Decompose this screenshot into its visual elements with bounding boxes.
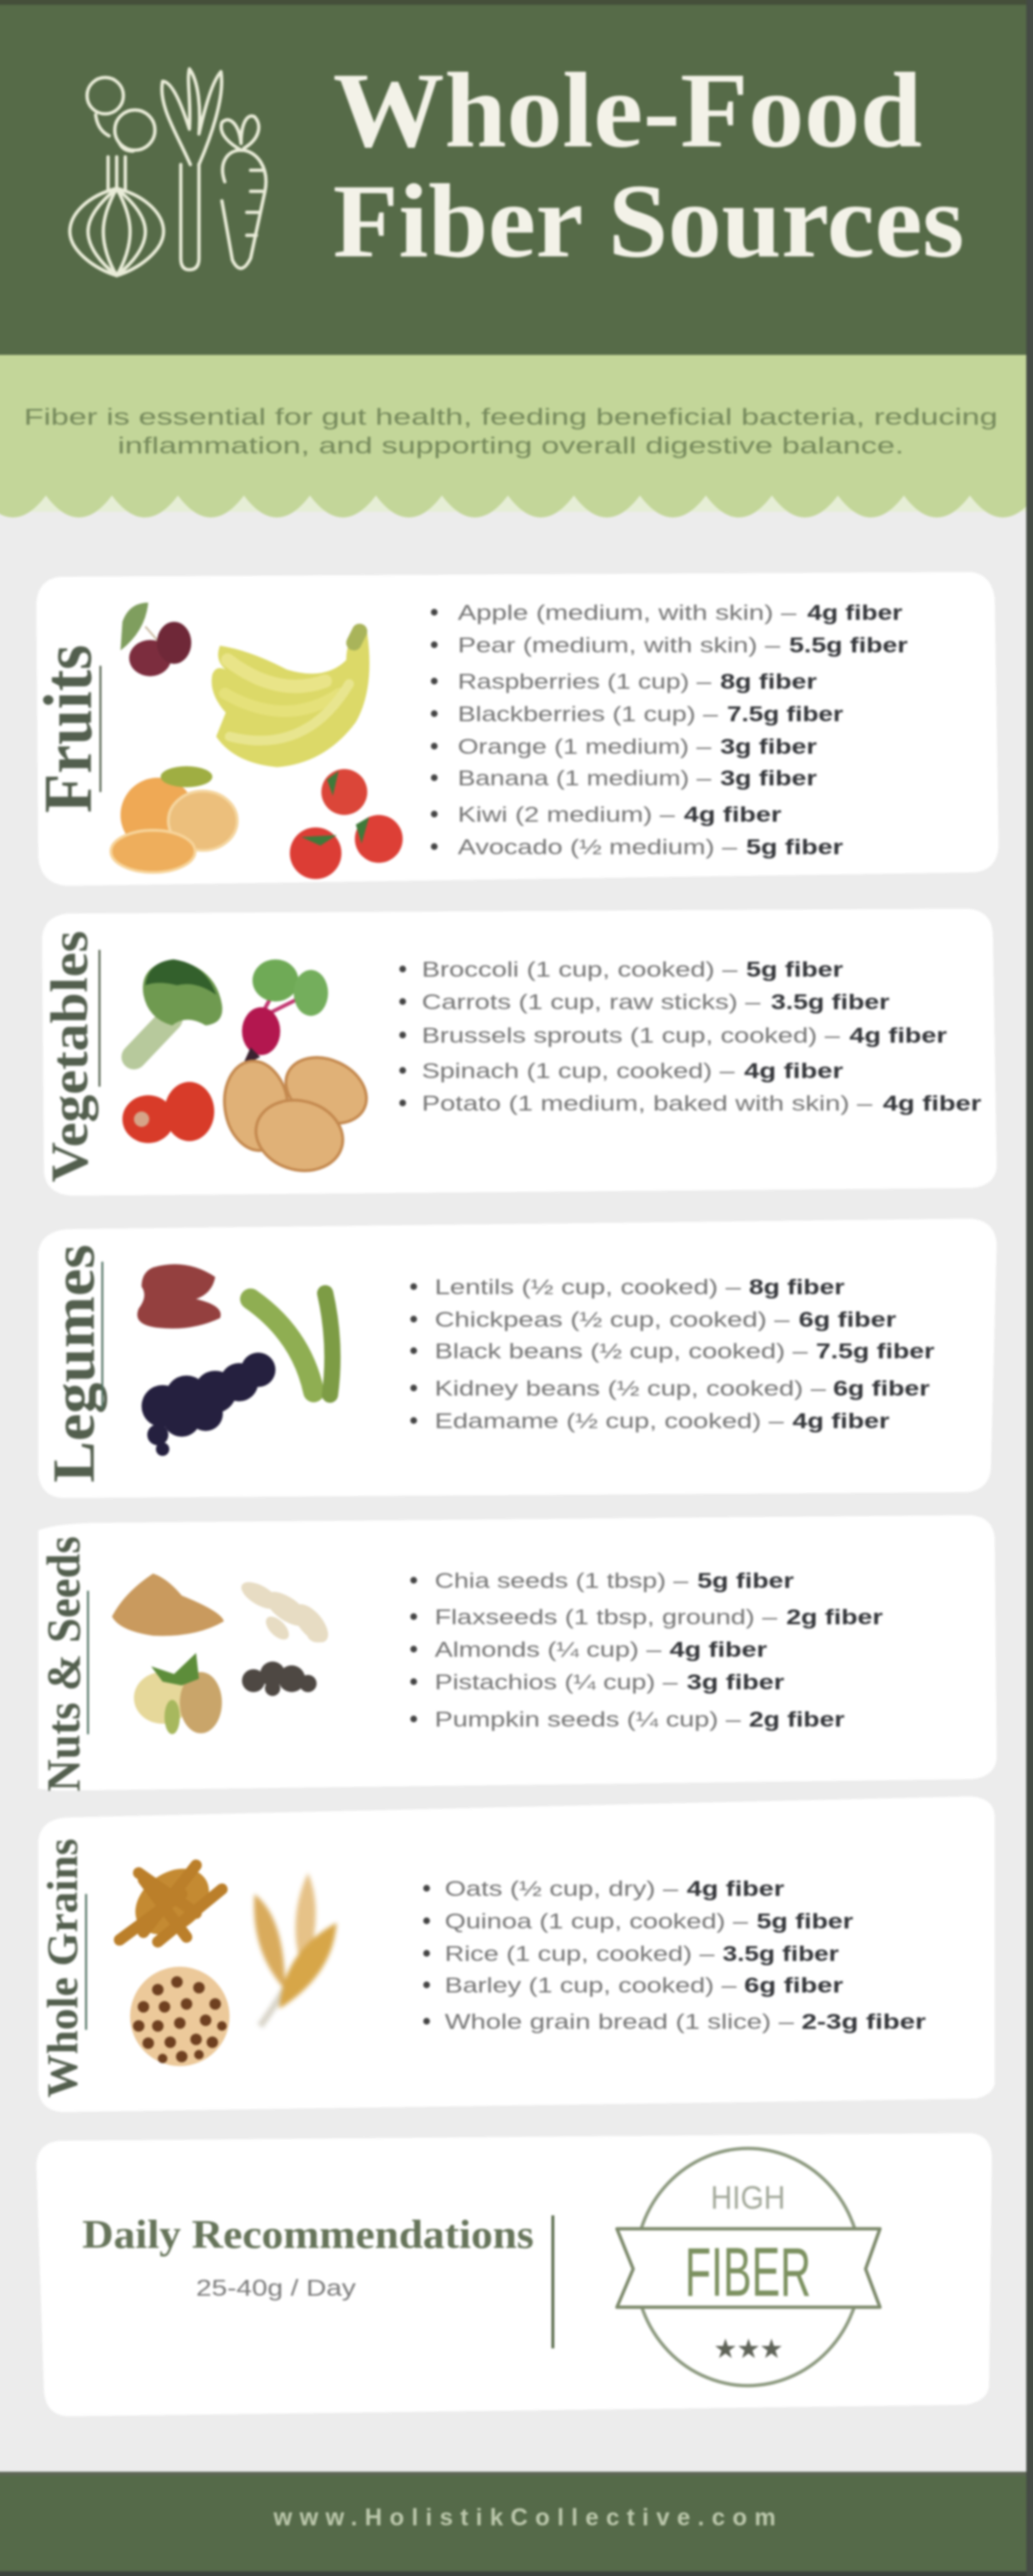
icon: strawberries	[290, 769, 403, 879]
list: whole grains: Rice (1 cup, cooked) –	[445, 1942, 715, 1966]
list: fruits: 4g fiber	[807, 601, 903, 625]
list: fruits: 8g fiber	[720, 670, 817, 694]
heading: vegetables: Vegetables	[40, 931, 99, 1182]
icon: bananas	[211, 631, 369, 767]
list: fruits: 5g fiber	[746, 835, 844, 859]
icon: cherries	[121, 603, 191, 676]
list: nuts and seeds: 5g fiber	[697, 1569, 794, 1593]
list: vegetables: 4g fiber	[849, 1024, 947, 1047]
list: fruits: Avocado (½ medium) –	[458, 835, 737, 859]
intro text	[24, 405, 998, 459]
list: legumes: 4g fiber	[792, 1409, 890, 1433]
list: whole grains: 6g fiber	[744, 1973, 844, 1997]
list: nuts and seeds: Chia seeds (1 tbsp) –	[434, 1569, 689, 1593]
list: fruits: Apple (medium, with skin) –	[458, 601, 797, 625]
icon: kidney beans	[138, 1265, 221, 1329]
list: nuts and seeds: 3g fiber	[687, 1670, 784, 1694]
list: legumes: Black beans (½ cup, cooked) –	[434, 1339, 808, 1363]
intro band with scalloped edge	[0, 355, 1033, 517]
list: legumes: Kidney beans (½ cup, cooked) –	[434, 1376, 826, 1400]
list: fruits: Blackberries (1 cup) –	[458, 702, 718, 726]
list: fruits: Kiwi (2 medium) –	[458, 803, 675, 826]
list: whole grains: 3.5g fiber	[723, 1942, 839, 1966]
heading: legumes: Legumes	[42, 1244, 107, 1483]
heading: nuts and seeds: Nuts & Seeds	[36, 1536, 90, 1792]
intro text: inflammation, and supporting overall digestive balance.	[118, 433, 904, 459]
icon: oats seeds	[237, 1576, 335, 1648]
icon: vegetables line art	[70, 69, 266, 275]
list: vegetables: 4g fiber	[883, 1091, 981, 1115]
list: vegetables: Carrots (1 cup, raw sticks) –	[422, 990, 761, 1014]
title: Fiber Sources	[333, 163, 964, 279]
list: fruits: Pear (medium, with skin) –	[458, 633, 780, 657]
header band	[0, 0, 1033, 355]
list: whole grains: Whole grain bread (1 slice) –	[445, 2010, 795, 2034]
icon: almonds	[112, 1574, 224, 1636]
icon: peppers	[122, 1082, 214, 1143]
list: legumes: 6g fiber	[799, 1308, 896, 1332]
icon: potatoes	[219, 1045, 377, 1180]
title	[333, 52, 964, 279]
list: fruits: 3g fiber	[720, 766, 817, 790]
panel: fruits	[30, 572, 999, 886]
list: legumes: 6g fiber	[833, 1376, 930, 1400]
icon: quinoa disk	[130, 1967, 230, 2066]
icon: oats	[120, 1855, 222, 1949]
icon: high fiber badge: ★★★	[714, 2333, 782, 2365]
panel: whole grains	[38, 1796, 995, 2112]
panel: vegetables	[40, 909, 997, 1196]
icon: beet	[242, 959, 328, 1067]
list: whole grains: 4g fiber	[687, 1877, 784, 1901]
icon: high fiber badge: FIBER	[685, 2235, 811, 2311]
list: vegetables: Broccoli (1 cup, cooked) –	[422, 958, 738, 981]
panel: nuts and seeds	[36, 1515, 997, 1792]
icon: broccoli	[134, 959, 222, 1057]
list: fruits: Raspberries (1 cup) –	[458, 670, 712, 694]
list: vegetables: 5g fiber	[746, 958, 844, 981]
list: legumes: 8g fiber	[749, 1275, 845, 1299]
icon: chia seeds	[242, 1662, 317, 1696]
title: Whole-Food	[333, 52, 922, 170]
list: vegetables: 3.5g fiber	[771, 990, 890, 1014]
list: fruits: 4g fiber	[684, 803, 781, 826]
list: whole grains: Oats (½ cup, dry) –	[445, 1877, 679, 1901]
list: nuts and seeds: Almonds (¼ cup) –	[434, 1638, 662, 1662]
list: legumes: Edamame (½ cup, cooked) –	[434, 1409, 784, 1433]
list: nuts and seeds: Pistachios (¼ cup) –	[434, 1670, 678, 1694]
icon: high fiber badge: HIGH	[711, 2180, 785, 2216]
list: vegetables: Potato (1 medium, baked with skin) –	[422, 1091, 873, 1115]
list: whole grains: Barley (1 cup, cooked) –	[445, 1973, 737, 1997]
daily amount: 25-40g / Day	[196, 2276, 356, 2301]
list: vegetables: Spinach (1 cup, cooked) –	[422, 1059, 736, 1083]
list: legumes: Lentils (½ cup, cooked) –	[434, 1275, 741, 1299]
footer band	[0, 2472, 1033, 2576]
list: vegetables	[400, 958, 981, 1115]
icon: oranges	[111, 766, 237, 872]
heading: daily recommendations: Daily Recommendations	[82, 2213, 534, 2257]
list: nuts and seeds: 4g fiber	[670, 1638, 767, 1662]
list: vegetables: Brussels sprouts (1 cup, cooked) –	[422, 1024, 841, 1047]
icon: edamame pods	[251, 1293, 333, 1395]
list: whole grains: 2-3g fiber	[802, 2010, 926, 2034]
icon: black beans	[142, 1353, 275, 1456]
heading: fruits: Fruits	[30, 645, 106, 813]
list: legumes: Chickpeas (½ cup, cooked) –	[434, 1308, 790, 1332]
list: nuts and seeds: Pumpkin seeds (¼ cup) –	[434, 1707, 741, 1731]
list: fruits: 5.5g fiber	[789, 633, 908, 657]
list: nuts and seeds	[410, 1569, 883, 1731]
list: fruits: Orange (1 medium) –	[458, 735, 712, 759]
list: whole grains: 5g fiber	[757, 1909, 853, 1933]
list: legumes: 7.5g fiber	[816, 1339, 934, 1363]
list: legumes	[410, 1275, 934, 1433]
list: nuts and seeds: 2g fiber	[749, 1707, 845, 1731]
list: nuts and seeds: 2g fiber	[786, 1605, 883, 1629]
footer website: www.HolistikCollective.com	[273, 2504, 776, 2531]
panel: daily recommendations	[36, 2133, 992, 2416]
panel: legumes	[38, 1219, 997, 1498]
icon: high fiber badge	[617, 2148, 880, 2386]
list: fruits	[430, 601, 908, 859]
list: nuts and seeds: Flaxseeds (1 tbsp, ground) –	[434, 1605, 778, 1629]
list: whole grains: Quinoa (1 cup, cooked) –	[445, 1909, 749, 1933]
list: fruits: Banana (1 medium) –	[458, 766, 712, 790]
intro text: Fiber is essential for gut health, feeding beneficial bacteria, reducing	[24, 405, 998, 430]
list: whole grains	[423, 1877, 926, 2034]
heading: whole grains: Whole Grains	[38, 1838, 86, 2098]
list: vegetables: 4g fiber	[744, 1059, 844, 1083]
list: fruits: 7.5g fiber	[727, 702, 844, 726]
icon: wheat	[254, 1873, 337, 2026]
icon: pistachios	[134, 1653, 222, 1734]
list: fruits: 3g fiber	[720, 735, 817, 759]
